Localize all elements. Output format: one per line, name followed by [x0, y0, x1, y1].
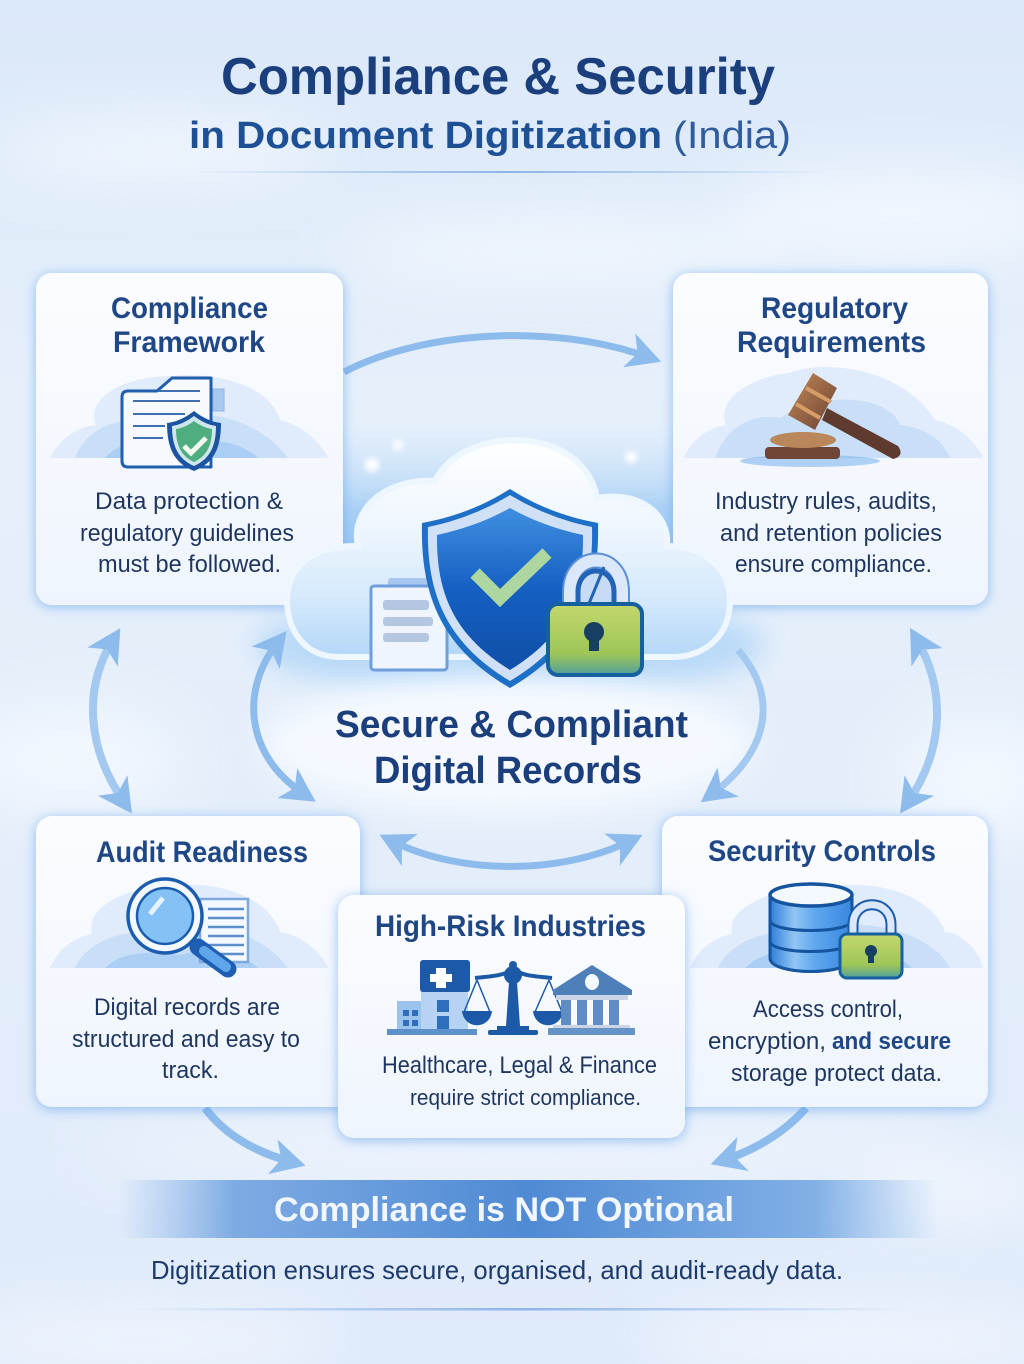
footer statement: Digitization ensures secure, organised, and audit-ready data.: [151, 1255, 843, 1285]
text: compliance framework description: must be followed.: [98, 551, 281, 578]
icon: padlock: [548, 560, 642, 675]
icon: gavel: [740, 373, 901, 467]
icon: document with shield: [122, 378, 224, 471]
text: high-risk industries description: [382, 1052, 657, 1110]
cloud: [287, 440, 730, 657]
icon backdrop cloud: [683, 367, 983, 458]
arrow: audit to security: [392, 841, 630, 866]
arrow: right loop: [908, 640, 937, 802]
title: Compliance & Security: [221, 48, 775, 106]
arrow: centre left: [254, 642, 304, 794]
heading: secure and compliant digital records: [335, 704, 688, 792]
text: regulatory requirements description: and retention policies: [720, 520, 942, 547]
title: [189, 48, 830, 173]
heading: security controls: Security Controls: [708, 835, 936, 868]
panel: security controls: [662, 816, 988, 1107]
text: regulatory requirements description: ensure compliance.: [735, 551, 932, 578]
heading: regulatory requirements: Regulatory: [761, 292, 908, 325]
heading: secure and compliant digital records: Secure & Compliant: [335, 704, 688, 746]
heading: compliance framework: [111, 292, 268, 359]
heading: audit readiness: Audit Readiness: [96, 836, 308, 869]
arrow: security to banner: [724, 1108, 806, 1160]
banner: compliance is not optional: Compliance is NOT Optional: [274, 1191, 734, 1229]
panel: compliance framework: [36, 273, 343, 605]
sparkles: [365, 440, 637, 472]
arrow: left loop: [93, 640, 124, 802]
icon: document: [371, 578, 447, 670]
text: security controls description: Access control,: [753, 996, 903, 1023]
heading: compliance framework: Framework: [113, 326, 265, 359]
text: audit readiness description: structured and easy to: [72, 1026, 300, 1053]
heading: high-risk industries: High-Risk Industries: [375, 910, 646, 943]
text: security controls description: storage protect data.: [731, 1060, 942, 1087]
text: high-risk industries description: require strict compliance.: [410, 1085, 641, 1110]
central cloud with shield: [287, 440, 730, 688]
text: audit readiness description: track.: [162, 1057, 219, 1084]
arrow: audit to banner: [205, 1108, 292, 1162]
icon: shield with check: [422, 489, 598, 688]
text: audit readiness description: Digital records are: [94, 994, 280, 1021]
text: compliance framework description: [80, 488, 294, 578]
panel: regulatory requirements: [673, 273, 988, 605]
panel: high-risk industries: [338, 895, 685, 1138]
heading: regulatory requirements: Requirements: [737, 326, 926, 359]
icon backdrop cloud: [50, 885, 328, 968]
text: compliance framework description: regulatory guidelines: [80, 520, 294, 547]
title: in Document Digitization: [189, 115, 662, 157]
text: regulatory requirements description: [715, 488, 942, 578]
text: security controls description: and secure: [832, 1028, 951, 1055]
central glow: [255, 425, 765, 813]
title: (India): [673, 115, 791, 157]
icon backdrop cloud: [50, 375, 328, 458]
text: high-risk industries description: Healthcare, Legal & Finance: [382, 1052, 657, 1079]
heading: compliance framework: Compliance: [111, 292, 268, 325]
text: compliance framework description: Data protection &: [95, 488, 283, 515]
banner: compliance is not optional: [118, 1180, 938, 1238]
icon: hospital, scales and bank: [387, 960, 635, 1035]
text: regulatory requirements description: Industry rules, audits,: [715, 488, 937, 515]
icon backdrop cloud: [690, 885, 983, 968]
text: audit readiness description: [72, 994, 300, 1084]
arrow: centre right: [712, 650, 763, 794]
heading: regulatory requirements: [737, 292, 926, 359]
text: security controls description: [708, 996, 951, 1087]
panel: audit readiness: [36, 816, 360, 1107]
arrow: framework to requirements: [344, 336, 648, 372]
icon: magnifier and document: [128, 879, 248, 969]
text: security controls description: encryption,: [708, 1028, 826, 1055]
icon: database and padlock: [770, 884, 902, 978]
heading: secure and compliant digital records: Digital Records: [374, 750, 642, 792]
